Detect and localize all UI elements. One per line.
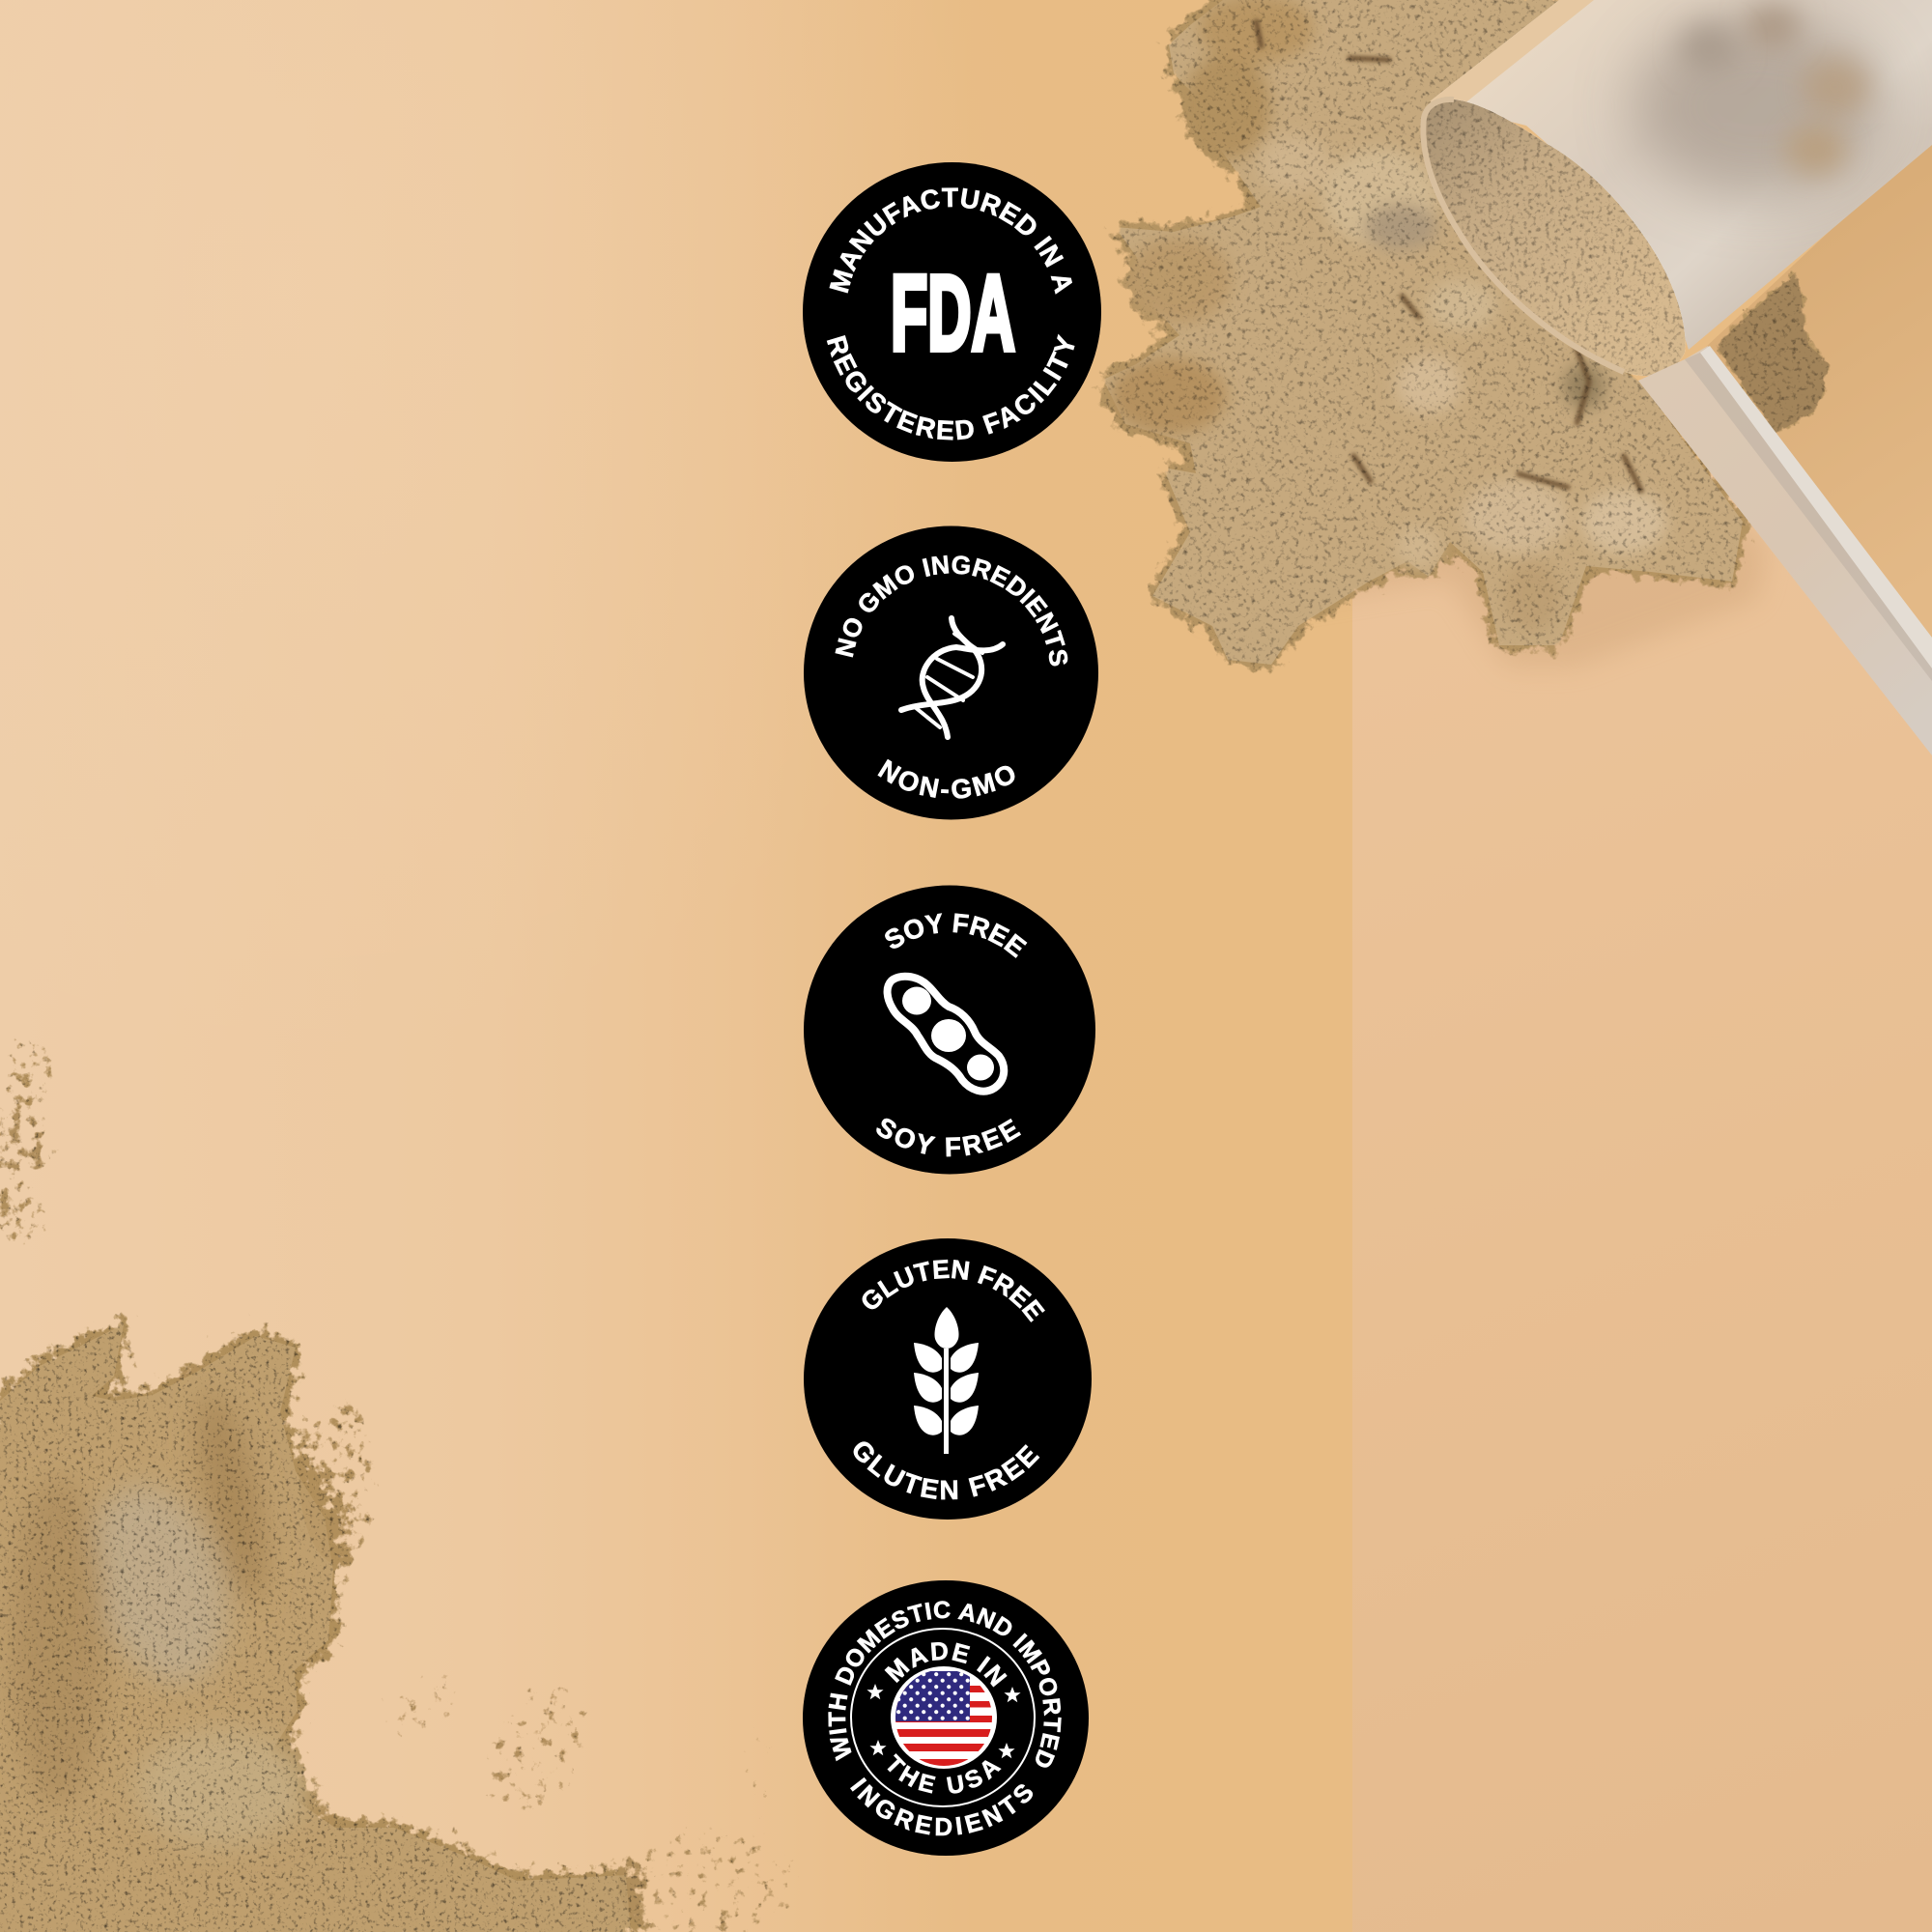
badge: non-GMO — [804, 526, 1098, 819]
outer bottom arc text: INGREDIENTS — [850, 1777, 1034, 1835]
inner ring — [851, 1629, 1035, 1806]
FDA wordmark: FDA — [891, 255, 1015, 374]
top arc text: MANUFACTURED IN A — [829, 187, 1072, 295]
icon: USA flag — [891, 1666, 997, 1769]
bottom arc text: REGISTERED FACILITY — [827, 334, 1074, 440]
icon: wheat — [914, 1307, 979, 1454]
scoop rim — [1423, 99, 1624, 372]
icon: stars — [867, 1684, 1021, 1758]
outer top arc text: WITH DOMESTIC AND IMPORTED — [828, 1601, 1062, 1768]
badge: soy free — [804, 885, 1095, 1175]
inner top arc text: MADE IN — [885, 1642, 1008, 1687]
icon: DNA helix — [901, 618, 1003, 737]
scoop cup body — [1430, 0, 1932, 350]
bottom arc text: SOY FREE — [876, 1119, 1021, 1157]
icon: soybean pod — [888, 977, 1004, 1092]
inner bottom arc text — [866, 1639, 1022, 1802]
inner bottom arc text: THE USA — [887, 1753, 1002, 1794]
outer bottom arc text — [823, 1596, 1066, 1845]
bottom arc text: GLUTEN FREE — [854, 1441, 1039, 1499]
top arc text: SOY FREE — [885, 913, 1028, 958]
scoop — [1423, 0, 1932, 755]
badge: made in the USA — [803, 1580, 1089, 1856]
powder inside scoop — [1423, 99, 1686, 376]
top arc text: GLUTEN FREE — [862, 1260, 1045, 1322]
badge: FDA registered facility — [803, 162, 1101, 462]
powder pile, upper right — [1103, 0, 1830, 665]
powder shadow — [1198, 386, 1768, 667]
top arc text: NO GMO INGREDIENTS — [835, 554, 1068, 667]
bottom arc text: NON-GMO — [877, 759, 1014, 799]
inner top arc text — [875, 1634, 1014, 1778]
scoop handle — [1638, 346, 1932, 755]
badge: gluten free — [804, 1238, 1092, 1520]
powder spill, lower left — [0, 1032, 802, 1932]
